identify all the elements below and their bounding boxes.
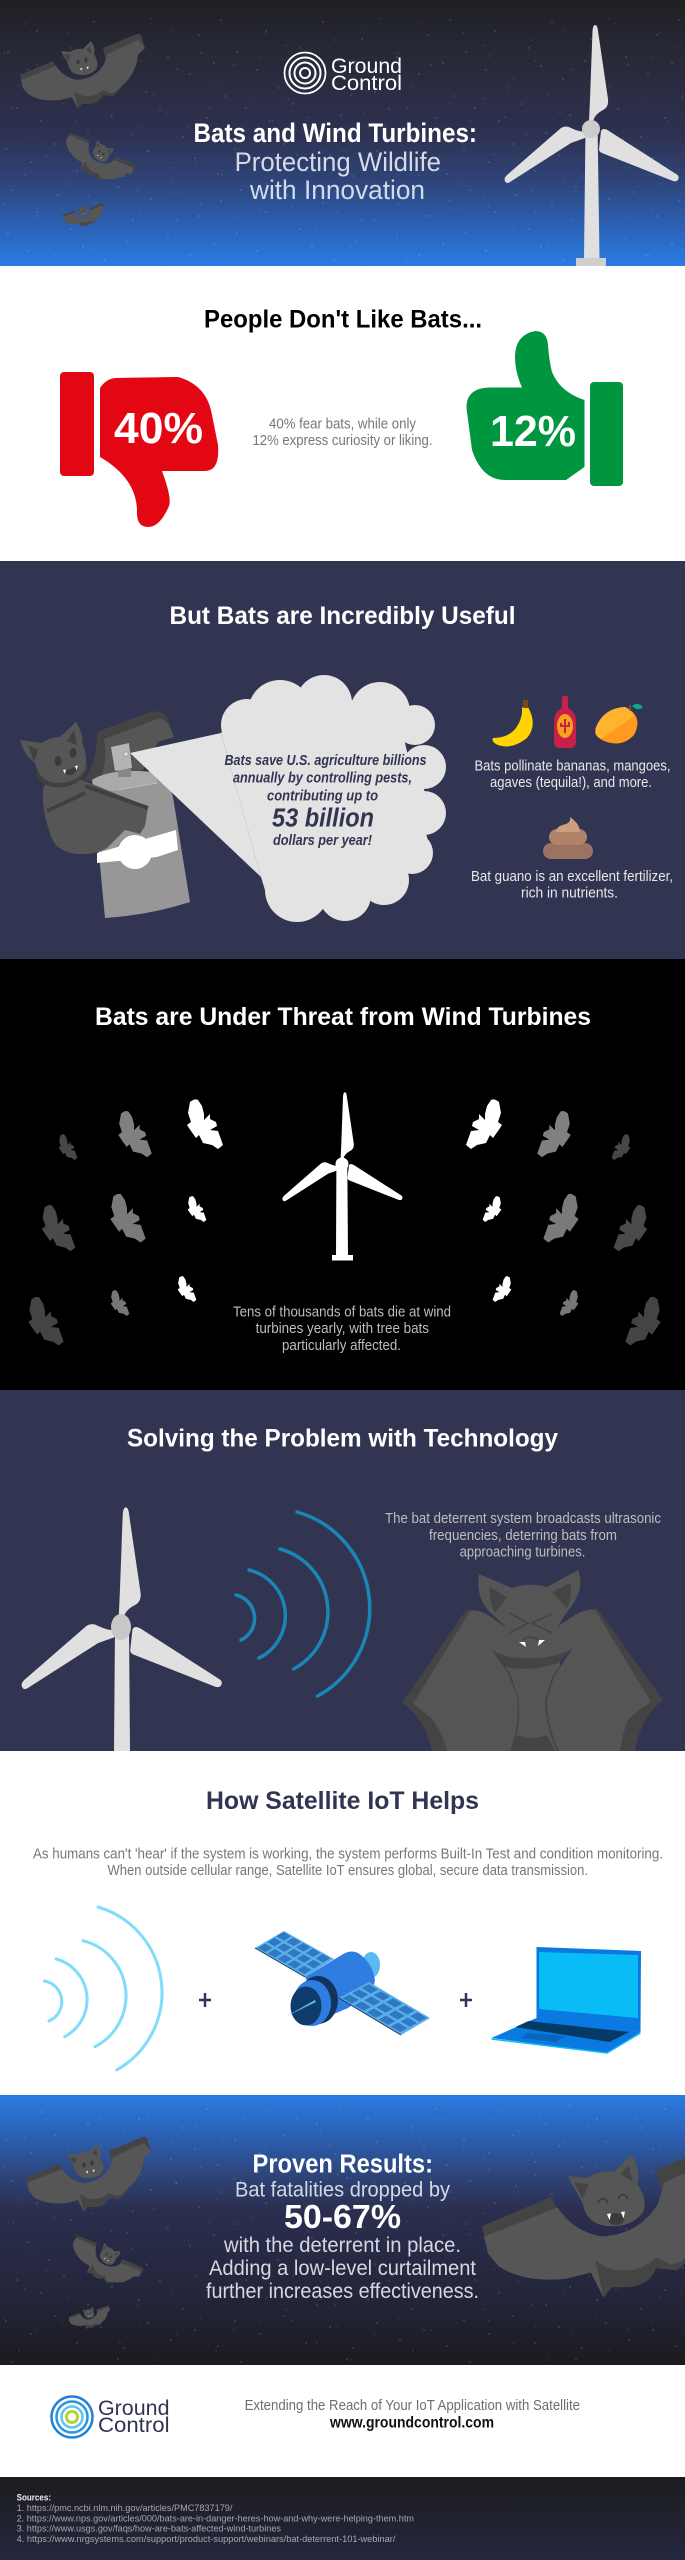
icon: green thumbs up 12% [466,331,623,486]
icon: red thumbs down 40%: 40% [114,404,203,453]
icons: bats right [466,1099,661,1346]
icon: medium bat [64,2219,145,2301]
heading: But Bats are Incredibly Useful [170,602,516,630]
text: fatalities [233,1304,451,1354]
icon: large smiling bat [482,2140,685,2298]
icon: bat holding spray [20,722,148,854]
icon: laptop [492,1947,641,2053]
text: results [206,2151,479,2303]
icon: bat raised wing [84,712,174,782]
logo: Ground Control white: Ground [331,55,402,78]
text: built-in test: When outside cellular range, Satellite IoT ensures global, secure data transmission. [108,1862,588,1879]
text: agriculture savings: contributing up to [267,789,378,805]
icon: satellite [255,1931,430,2035]
panel: footer [0,2365,685,2477]
text: deterrent [385,1510,661,1561]
text: results: further increases effectiveness. [206,2280,479,2303]
text: fear statistic: 12% express curiosity or liking. [252,433,432,449]
heading: How Satellite IoT Helps [206,1787,479,1815]
panel: proven results [0,2095,685,2365]
icon: tequila bottle [554,696,576,748]
text: fear statistic: 40% fear bats, while only [269,417,417,433]
text: tagline [245,2397,580,2432]
icons: bats left [28,1099,223,1346]
icon: ultrasonic waves [236,1512,370,1696]
icon: banana [493,707,533,746]
icon: guano [543,817,593,859]
icon: plus [460,1993,472,2007]
text: agriculture savings: annually by controlling pests, [233,771,412,787]
panel: bats are useful [0,561,685,959]
icon: signal waves [44,1907,162,2070]
text: fear statistic [252,417,432,449]
text: guano: rich in nutrients. [521,885,618,902]
text: agriculture savings: 53 billion [272,805,374,833]
panel: under threat [0,959,685,1390]
logo: Ground Control colour: Control [98,2414,170,2437]
icon: small bat [68,2303,110,2330]
icon: white turbine [282,1092,402,1260]
title: Bats and Wind Turbines: [194,118,477,148]
text: results: Adding a low-level curtailment [209,2257,476,2280]
heading: People Don't Like Bats... [204,306,482,334]
text: results: Bat fatalities dropped by [235,2179,450,2202]
icon: large bat [20,34,145,109]
text: built-in test [33,1846,663,1879]
text: guano [471,868,673,902]
panel: solving the problem [0,1390,685,1751]
text: results: 50-67% [284,2198,401,2235]
title: with Innovation [249,175,425,205]
icon: spray can [92,743,190,918]
icon: plus [199,1993,211,2007]
title: Protecting Wildlife [235,147,441,177]
callout: spray cloud [130,675,446,922]
text: sources list: 3. https://www.usgs.gov/faqs/how-are-bats-affected-wind-turbines [17,2524,281,2535]
text: agriculture savings: dollars per year! [273,833,372,849]
panel: sources [0,2477,685,2560]
text: agriculture savings: Bats save U.S. agriculture billions [224,753,426,769]
text: pollination: agaves (tequila!), and more. [490,774,652,791]
text: sources list: 4. https://www.nrgsystems.com/support/product-support/webinars/bat-deterrent-101-webinar/ [17,2534,396,2545]
icon: wind turbine [505,25,679,266]
logo: Ground Control white: Control [331,72,402,95]
text: sources list: 2. https://www.nps.gov/articles/000/bats-are-in-danger-heres-how-and-why-were-helping-them.htm [17,2513,414,2524]
icon: mango [595,704,643,743]
text: fatalities: Tens of thousands of bats die at wind [233,1304,451,1321]
logo: Ground Control colour [52,2396,170,2438]
heading: Solving the Problem with Technology [127,1425,558,1453]
logo: Ground Control colour: Ground [98,2397,170,2420]
text: agriculture savings [224,753,426,849]
text: sources list: Sources: [17,2493,51,2504]
icon: medium bat [57,116,138,198]
text: pollination [474,758,670,791]
panel: people don't like bats [0,266,685,561]
text: fatalities: turbines yearly, with tree bats [256,1320,429,1337]
text: tagline: Extending the Reach of Your IoT Application with Satellite [245,2397,580,2414]
text: deterrent: approaching turbines. [460,1544,585,1561]
text: results: Proven Results: [252,2151,433,2179]
icon: bat [26,2137,151,2212]
text: deterrent: frequencies, deterring bats from [429,1527,617,1544]
icon: turbine [22,1507,222,1751]
icon: green thumbs up 12%: 12% [490,407,576,456]
panel: satellite IoT [0,1751,685,2095]
text: sources list: 1. https://pmc.ncbi.nlm.nih.gov/articles/PMC7837179/ [17,2503,233,2514]
text: tagline: www.groundcontrol.com [329,2415,494,2432]
text: fatalities: particularly affected. [282,1337,401,1354]
icon: banana stem [523,700,528,708]
text: results: with the deterrent in place. [223,2234,461,2257]
heading: Bats are Under Threat from Wind Turbines [95,1003,591,1031]
icon: bat covering ears [402,1570,663,1751]
icon: red thumbs down 40% [60,372,218,527]
title [194,118,477,205]
panel: hero header [0,0,685,266]
logo: Ground Control white [284,52,402,95]
icon: small bat [62,201,104,228]
text: sources list [17,2493,414,2545]
